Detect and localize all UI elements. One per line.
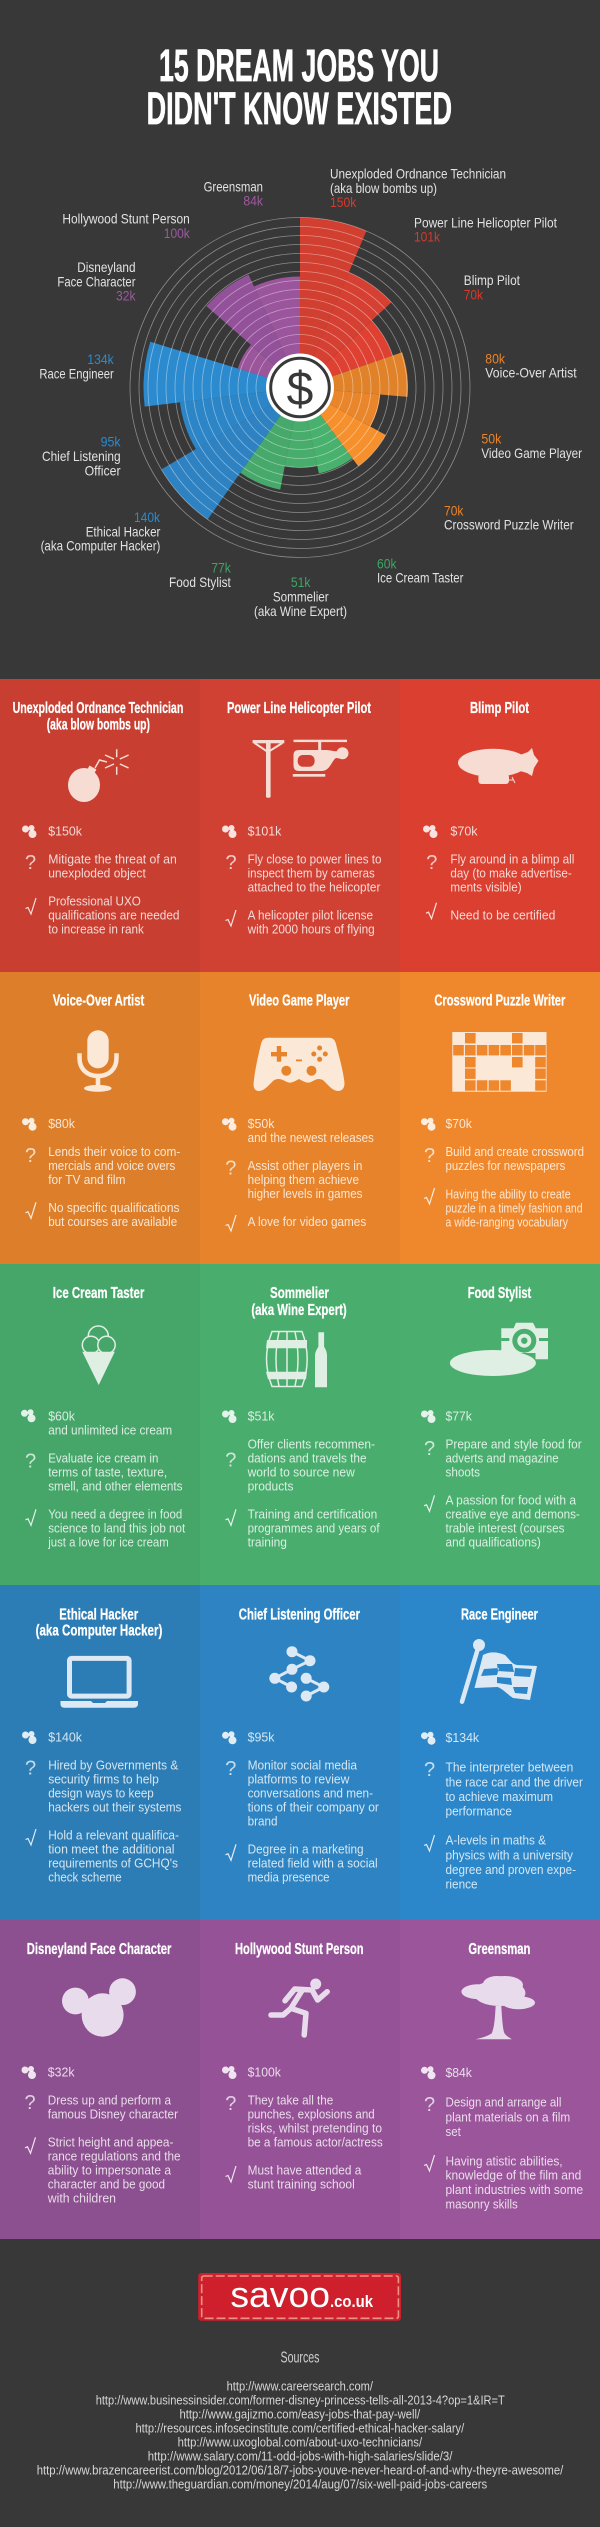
- what they do: The interpreter between: [446, 1760, 573, 1775]
- chart labels: Race Engineer: [39, 365, 114, 381]
- salary: [222, 2065, 281, 2080]
- what they do: punches, explosions and: [248, 2107, 375, 2122]
- salary: $95k: [248, 1730, 275, 1745]
- what they do: Build and create crossword: [446, 1144, 584, 1159]
- what they do: performance: [446, 1804, 512, 1819]
- card: Chief Listening Officer: Chief Listening Officer: [239, 1606, 360, 1623]
- chart labels: Ethical Hacker: [86, 523, 161, 539]
- requirements: stunt training school: [248, 2177, 355, 2192]
- salary: $150k: [48, 824, 82, 839]
- sources list: http://www.uxoglobal.com/about-uxo-technicians/: [178, 2435, 422, 2450]
- chart labels: 140k: [134, 509, 161, 525]
- requirements: rience: [446, 1877, 478, 1892]
- salary: $32k: [48, 2064, 75, 2079]
- salary: [421, 1730, 480, 1745]
- icon: game controller: [254, 1038, 344, 1091]
- chart labels: 101k: [414, 229, 441, 245]
- title: [147, 40, 452, 134]
- requirements: [426, 903, 555, 923]
- requirements: related field with a social: [248, 1855, 378, 1870]
- what they do: design ways to keep: [48, 1785, 154, 1800]
- what they do: unexploded object: [48, 865, 146, 880]
- card: Unexploded Ordnance Technician: Unexploded Ordnance Technician: [13, 700, 183, 717]
- card: Greensman: [421, 1941, 583, 2212]
- requirements: a wide-ranging vocabulary: [446, 1214, 568, 1229]
- salary: $60k: [48, 1409, 75, 1424]
- requirements: You need a degree in food: [48, 1507, 182, 1522]
- requirements: media presence: [248, 1869, 330, 1884]
- salary: [421, 2065, 472, 2080]
- what they do: [225, 852, 382, 895]
- what they do: Mitigate the threat of an: [48, 851, 177, 866]
- what they do: shoots: [446, 1465, 480, 1480]
- requirements: to increase in rank: [48, 921, 144, 936]
- panel: orange row: [0, 972, 600, 1264]
- salary: $51k: [248, 1409, 275, 1424]
- requirements: but courses are available: [48, 1214, 177, 1229]
- sources list: http://www.gajizmo.com/easy-jobs-that-pay-well/: [180, 2407, 421, 2422]
- what they do: ?: [25, 1145, 36, 1167]
- card: Voice-Over Artist: Voice-Over Artist: [53, 992, 145, 1009]
- icon: crossword grid: [452, 1032, 546, 1092]
- card: Blimp Pilot: [423, 700, 574, 923]
- requirements: creative eye and demons-: [446, 1507, 580, 1522]
- chart labels: 50k: [481, 431, 502, 447]
- what they do: Design and arrange all: [446, 2095, 561, 2110]
- chart labels: Face Character: [57, 273, 136, 289]
- salary: $134k: [446, 1730, 480, 1745]
- card: Sommelier: Sommelier: [270, 1285, 329, 1302]
- card: Video Game Player: Video Game Player: [249, 992, 349, 1009]
- salary: [22, 824, 82, 839]
- salary: [222, 824, 282, 839]
- chart labels: (aka Wine Expert): [254, 603, 347, 619]
- what they do: [24, 2092, 179, 2121]
- what they do: set: [446, 2124, 461, 2139]
- chart labels: 80k: [485, 351, 506, 367]
- what they do: to achieve maximum: [446, 1789, 553, 1804]
- what they do: [25, 1450, 183, 1494]
- chart labels: 70k: [444, 502, 464, 518]
- what they do: Offer clients recommen-: [248, 1437, 375, 1452]
- requirements: Degree in a marketing: [248, 1841, 364, 1856]
- logo: savoo.co.uk: savoo: [230, 2274, 330, 2315]
- panel: red row: [0, 679, 600, 972]
- what they do: tions of their company or: [248, 1800, 380, 1815]
- requirements: training: [248, 1535, 287, 1550]
- what they do: day (to make advertise-: [450, 866, 572, 881]
- what they do: Evaluate ice cream in: [48, 1451, 158, 1466]
- chart labels: 32k: [116, 288, 136, 304]
- panel: green row: [0, 1264, 600, 1585]
- salary: [421, 1409, 472, 1424]
- requirements: A passion for food with a: [446, 1493, 577, 1508]
- card: Voice-Over Artist: [22, 992, 180, 1229]
- card: Unexploded Ordnance Technician: (aka blow bombs up): [47, 717, 150, 734]
- chart labels: Power Line Helicopter Pilot: [414, 214, 557, 230]
- panel: blue row: [0, 1585, 600, 1920]
- requirements: ability to impersonate a: [48, 2162, 172, 2177]
- card: Hollywood Stunt Person: [222, 1941, 383, 2192]
- salary: $140k: [48, 1729, 82, 1744]
- requirements: Professional UXO: [48, 893, 141, 908]
- requirements: Having atistic abilities,: [446, 2153, 563, 2168]
- card: Race Engineer: [421, 1606, 584, 1892]
- salary: $77k: [446, 1409, 472, 1424]
- what they do: plant materials on a film: [446, 2109, 570, 2124]
- what they do: Assist other players in: [248, 1158, 362, 1173]
- salary: and the newest releases: [248, 1130, 374, 1145]
- icon: dollar coin: $: [287, 363, 313, 416]
- chart labels: [39, 166, 582, 619]
- requirements: [26, 1200, 180, 1229]
- icon: bomb: [68, 749, 129, 802]
- requirements: character and be good: [48, 2176, 165, 2191]
- what they do: platforms to review: [248, 1772, 350, 1787]
- what they do: ?: [424, 1145, 435, 1167]
- salary: [22, 2064, 75, 2079]
- chart labels: 95k: [101, 434, 121, 450]
- sources heading: Sources: [280, 2350, 320, 2367]
- card: Sommelier: [222, 1285, 380, 1550]
- card: Food Stylist: Food Stylist: [468, 1285, 532, 1302]
- icon: blimp: [458, 748, 538, 784]
- card: Hollywood Stunt Person: Hollywood Stunt Person: [235, 1941, 364, 1958]
- what they do: conversations and men-: [248, 1786, 373, 1801]
- icon: barrel and bottle: [266, 1332, 327, 1387]
- salary: [222, 1409, 275, 1424]
- chart labels: Ice Cream Taster: [377, 570, 464, 586]
- card: Race Engineer: Race Engineer: [461, 1606, 538, 1623]
- icon: network nodes: [269, 1646, 329, 1702]
- card: Greensman: Greensman: [468, 1941, 530, 1958]
- salary: $70k: [446, 1116, 472, 1131]
- requirements: Training and certification: [248, 1507, 377, 1522]
- requirements: Hold a relevant qualifica-: [48, 1827, 179, 1842]
- what they do: smell, and other elements: [48, 1479, 183, 1494]
- what they do: [225, 2093, 383, 2150]
- what they do: puzzles for newspapers: [446, 1158, 566, 1173]
- requirements: trable interest (courses: [446, 1521, 565, 1536]
- sources list: http://resources.infosecinstitute.com/certified-ethical-hacker-salary/: [136, 2421, 465, 2436]
- requirements: [26, 1507, 186, 1550]
- chart labels: 150k: [330, 194, 357, 210]
- requirements: [424, 1493, 580, 1550]
- what they do: be a famous actor/actress: [248, 2135, 383, 2150]
- requirements: Having the ability to create: [446, 1186, 571, 1201]
- what they do: Fly around in a blimp all: [450, 852, 574, 867]
- requirements: qualifications are needed: [48, 907, 180, 922]
- what they do: ?: [225, 1158, 236, 1180]
- what they do: ?: [225, 852, 237, 874]
- requirements: with children: [47, 2190, 116, 2205]
- what they do: Monitor social media: [248, 1758, 358, 1773]
- card: Unexploded Ordnance Technician: [13, 700, 183, 936]
- icon: running figure: [271, 1978, 327, 2035]
- chart labels: Voice-Over Artist: [485, 365, 577, 381]
- requirements: requirements of GCHQ's: [48, 1855, 178, 1870]
- card: Disneyland Face Character: [22, 1941, 181, 2205]
- icon: chequered flag: [462, 1639, 537, 1702]
- what they do: ?: [24, 2092, 36, 2114]
- requirements: [226, 908, 375, 937]
- requirements: A helicopter pilot license: [248, 908, 373, 923]
- card: Disneyland Face Character: Disneyland Face Character: [27, 1941, 171, 1958]
- card: Ethical Hacker: Ethical Hacker: [59, 1606, 138, 1623]
- salary: [423, 824, 478, 839]
- chart labels: Unexploded Ordnance Technician: [330, 166, 506, 182]
- icon: dollar coin: [266, 354, 334, 422]
- requirements: physics with a university: [446, 1847, 573, 1862]
- what they do: [25, 851, 177, 880]
- what they do: ?: [424, 2094, 435, 2116]
- sources list: http://www.businessinsider.com/former-disney-princess-tells-all-2013-4?op=1&IR=T: [96, 2393, 505, 2408]
- icon: laptop: [60, 1658, 138, 1708]
- salary: [22, 1116, 75, 1131]
- what they do: ?: [225, 1450, 236, 1472]
- what they do: famous Disney character: [48, 2106, 179, 2121]
- what they do: world to source new: [247, 1465, 355, 1480]
- requirements: A-levels in maths &: [446, 1833, 546, 1848]
- chart labels: Video Game Player: [481, 445, 582, 461]
- card: Ice Cream Taster: Ice Cream Taster: [53, 1285, 144, 1302]
- card: Ethical Hacker: [22, 1606, 182, 1884]
- requirements: No specific qualifications: [48, 1200, 180, 1215]
- card: Video Game Player: [222, 992, 374, 1231]
- chart labels: 77k: [211, 560, 232, 576]
- icon: tree: [461, 1976, 535, 2039]
- what they do: attached to the helicopter: [248, 880, 381, 895]
- icon: microphone: [80, 1030, 116, 1092]
- what they do: ?: [426, 852, 437, 874]
- icon: plate and camera: [450, 1323, 548, 1376]
- sources list: http://www.theguardian.com/money/2014/aug/07/six-well-paid-jobs-careers: [113, 2477, 488, 2492]
- requirements: tion meet the additional: [48, 1841, 175, 1856]
- salary: $101k: [248, 824, 282, 839]
- what they do: They take all the: [248, 2093, 333, 2108]
- panel: purple row: [0, 1920, 600, 2239]
- card: Power Line Helicopter Pilot: [222, 700, 382, 937]
- card: Ice Cream Taster: [21, 1285, 186, 1550]
- requirements: knowledge of the film and: [446, 2168, 581, 2183]
- what they do: brand: [248, 1814, 278, 1829]
- what they do: ?: [424, 1759, 435, 1781]
- requirements: [26, 893, 180, 936]
- salary: [421, 1116, 472, 1131]
- salary: $80k: [48, 1116, 75, 1131]
- sources list: http://www.careersearch.com/: [227, 2379, 373, 2394]
- chart labels: Officer: [85, 462, 121, 478]
- requirements: degree and proven expe-: [446, 1862, 576, 1877]
- what they do: dations and travels the: [248, 1451, 367, 1466]
- requirements: with 2000 hours of flying: [247, 922, 375, 937]
- requirements: [226, 1507, 380, 1550]
- chart labels: 70k: [464, 286, 484, 302]
- what they do: [424, 1437, 582, 1480]
- salary: $50k: [248, 1116, 275, 1131]
- card: Blimp Pilot: Blimp Pilot: [470, 700, 529, 717]
- requirements: [25, 2134, 181, 2205]
- requirements: rance regulations and the: [48, 2148, 181, 2163]
- what they do: ?: [225, 2093, 236, 2115]
- chart labels: Chief Listening: [42, 448, 121, 464]
- chart labels: Crossword Puzzle Writer: [444, 517, 574, 533]
- requirements: masonry skills: [446, 2197, 518, 2212]
- card: Power Line Helicopter Pilot: Power Line Helicopter Pilot: [227, 700, 371, 717]
- salary: [222, 1730, 275, 1745]
- what they do: adverts and magazine: [446, 1451, 559, 1466]
- what they do: Hired by Governments &: [48, 1757, 179, 1772]
- requirements: plant industries with some: [446, 2182, 583, 2197]
- what they do: inspect them by cameras: [248, 866, 375, 881]
- card: Ethical Hacker: (aka Computer Hacker): [36, 1623, 162, 1640]
- requirements: programmes and years of: [248, 1521, 380, 1536]
- card: Chief Listening Officer: [222, 1606, 380, 1884]
- sources list: http://www.salary.com/11-odd-jobs-with-high-salaries/slide/3/: [148, 2449, 453, 2464]
- what they do: ?: [25, 1450, 36, 1472]
- what they do: ments visible): [450, 880, 522, 895]
- what they do: [25, 1757, 182, 1814]
- what they do: ?: [25, 852, 36, 874]
- what they do: Dress up and perform a: [48, 2092, 172, 2107]
- chart labels: (aka Computer Hacker): [41, 538, 160, 554]
- what they do: [424, 1144, 584, 1173]
- what they do: terms of taste, texture,: [48, 1465, 167, 1480]
- requirements: check scheme: [48, 1869, 122, 1884]
- chart labels: Disneyland: [77, 259, 136, 275]
- requirements: science to land this job not: [48, 1521, 186, 1536]
- what they do: mercials and voice overs: [48, 1158, 176, 1173]
- what they do: [25, 1144, 180, 1187]
- chart labels: Food Stylist: [169, 574, 231, 590]
- what they do: higher levels in games: [248, 1186, 363, 1201]
- logo: savoo.co.uk: [198, 2273, 401, 2321]
- requirements: and qualifications): [446, 1535, 541, 1550]
- what they do: Prepare and style food for: [446, 1437, 582, 1452]
- chart labels: 84k: [243, 193, 264, 209]
- what they do: ?: [424, 1438, 435, 1460]
- requirements: [226, 1841, 378, 1884]
- requirements: Strict height and appea-: [48, 2134, 173, 2149]
- chart labels: 134k: [87, 351, 115, 367]
- chart labels: Greensman: [204, 178, 263, 194]
- requirements: [424, 1833, 576, 1892]
- card: Crossword Puzzle Writer: [421, 992, 584, 1229]
- what they do: Lends their voice to com-: [48, 1144, 180, 1159]
- requirements: just a love for ice cream: [47, 1535, 169, 1550]
- what they do: hackers out their systems: [48, 1799, 182, 1814]
- requirements: [424, 2153, 583, 2212]
- what they do: [225, 1758, 380, 1829]
- chart labels: Blimp Pilot: [464, 272, 520, 288]
- salary: $70k: [450, 824, 478, 839]
- salary: and unlimited ice cream: [48, 1423, 172, 1438]
- what they do: for TV and film: [48, 1172, 126, 1187]
- what they do: risks, whilst pretending to: [248, 2121, 382, 2136]
- requirements: Need to be certified: [450, 908, 555, 923]
- salary: [21, 1409, 172, 1438]
- logo: savoo.co.uk: .co.uk: [330, 2292, 373, 2311]
- what they do: helping them achieve: [248, 1172, 359, 1187]
- requirements: [226, 1214, 367, 1231]
- salary: $84k: [446, 2065, 472, 2080]
- requirements: [226, 2163, 362, 2192]
- salary: $100k: [248, 2065, 281, 2080]
- what they do: [225, 1437, 375, 1494]
- chart labels: Sommelier: [273, 588, 329, 604]
- chart labels: 100k: [164, 225, 191, 241]
- what they do: the race car and the driver: [446, 1774, 584, 1789]
- chart labels: Hollywood Stunt Person: [62, 211, 190, 227]
- requirements: [424, 1186, 582, 1229]
- icon: mouse ears: [62, 1978, 136, 2037]
- sources list: [37, 2379, 564, 2492]
- what they do: products: [248, 1479, 294, 1494]
- card: Food Stylist: [421, 1285, 582, 1550]
- radial salary chart: [130, 218, 470, 558]
- icon: ice cream cone: [82, 1326, 115, 1385]
- what they do: ?: [225, 1758, 236, 1780]
- chart labels: 60k: [377, 555, 397, 571]
- what they do: [426, 852, 574, 895]
- requirements: Must have attended a: [248, 2163, 362, 2178]
- chart labels: (aka blow bombs up): [330, 180, 437, 196]
- what they do: [424, 2094, 570, 2139]
- requirements: [26, 1827, 179, 1884]
- what they do: ?: [25, 1757, 36, 1779]
- salary: [22, 1729, 82, 1744]
- what they do: Fly close to power lines to: [248, 852, 382, 867]
- icon: pylon and helicopter: [253, 740, 348, 798]
- card: Sommelier: (aka Wine Expert): [251, 1302, 347, 1319]
- salary: [222, 1116, 374, 1145]
- what they do: [424, 1759, 584, 1819]
- what they do: security firms to help: [48, 1771, 159, 1786]
- requirements: A love for video games: [248, 1214, 367, 1229]
- what they do: [225, 1158, 363, 1201]
- chart labels: 51k: [291, 574, 311, 590]
